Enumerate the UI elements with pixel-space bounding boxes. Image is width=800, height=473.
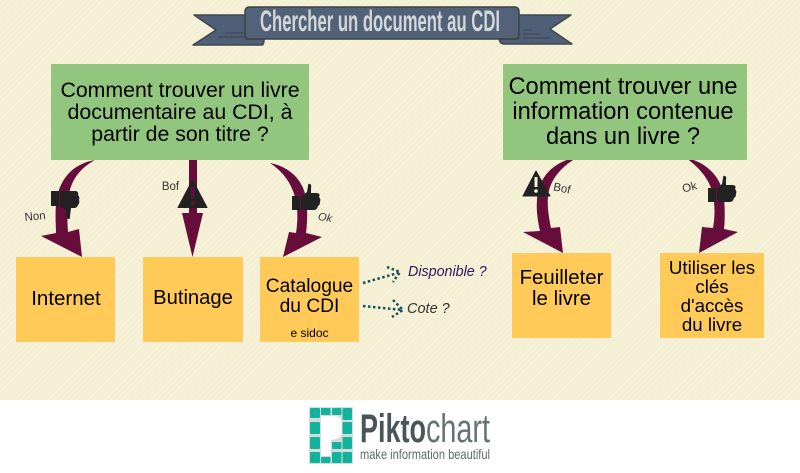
box: Utiliser les clés: clés <box>695 276 729 296</box>
arrow: Internet <box>41 160 95 257</box>
box: Utiliser les clés <box>660 253 764 338</box>
heading box: livre documentaire <box>51 64 309 160</box>
heading box: information dans un livre: information contenue <box>512 98 734 124</box>
logo: Piktochart: make information beautiful <box>360 446 490 462</box>
label: Disponible: Disponible ? <box>408 264 487 280</box>
arrow: Utiliser <box>686 158 738 253</box>
box: Internet <box>16 257 115 342</box>
box: Feuilleter le livre: le livre <box>532 288 591 310</box>
heading box: information dans un livre: dans un livre ? <box>546 124 700 150</box>
heading box: livre documentaire: partir de son titre ? <box>91 122 269 146</box>
box: Catalogue du CDI: Catalogue <box>266 276 353 297</box>
label: Bof: Bof <box>162 181 180 193</box>
label: Ok: Ok <box>317 211 333 225</box>
box: Feuilleter le livre: Feuilleter <box>520 267 603 289</box>
heading box: livre documentaire: Comment trouver un livre <box>60 78 300 102</box>
dotted arrow: Disponible <box>363 267 400 283</box>
icon: warning triangle <box>178 180 207 208</box>
title banner <box>193 5 572 45</box>
box: Internet: Internet <box>31 286 101 310</box>
heading box: information dans un livre <box>503 64 747 160</box>
box: Butinage <box>143 257 243 342</box>
arrow: Feuilleter <box>523 157 578 253</box>
dotted arrow: Cote <box>363 300 403 317</box>
icon: warning triangle right <box>523 171 550 196</box>
heading box: livre documentaire: documentaire au CDI, à <box>68 100 292 124</box>
logo: Piktochart <box>309 407 490 464</box>
label: Ok right: Ok <box>681 180 699 196</box>
logo: Piktochart: Pikto <box>360 407 426 451</box>
logo: Piktochart: chart <box>426 407 490 451</box>
box: Catalogue du CDI <box>260 257 359 342</box>
arrow: Butinage <box>182 157 203 257</box>
icon: thumb down <box>51 191 79 219</box>
box: Catalogue du CDI: e sidoc <box>290 326 329 340</box>
box: Catalogue du CDI: du CDI <box>280 296 339 317</box>
box: Feuilleter le livre <box>512 253 611 338</box>
label: Non: Non <box>24 210 46 224</box>
icon: thumb up <box>292 184 320 210</box>
heading box: information dans un livre: Comment trouver une <box>508 74 738 100</box>
title banner: Chercher un document au CDI <box>260 5 500 38</box>
box: Utiliser les clés: d'accès <box>681 294 743 316</box>
box: Utiliser les clés: du livre <box>682 314 742 334</box>
arrow: Catalogue <box>270 163 322 257</box>
box: Butinage: Butinage <box>153 287 233 309</box>
box: Utiliser les clés: Utiliser les <box>669 256 755 278</box>
label: Bof right: Bof <box>552 181 572 197</box>
label: Cote: Cote ? <box>407 301 451 317</box>
icon: thumb up right <box>708 176 736 202</box>
